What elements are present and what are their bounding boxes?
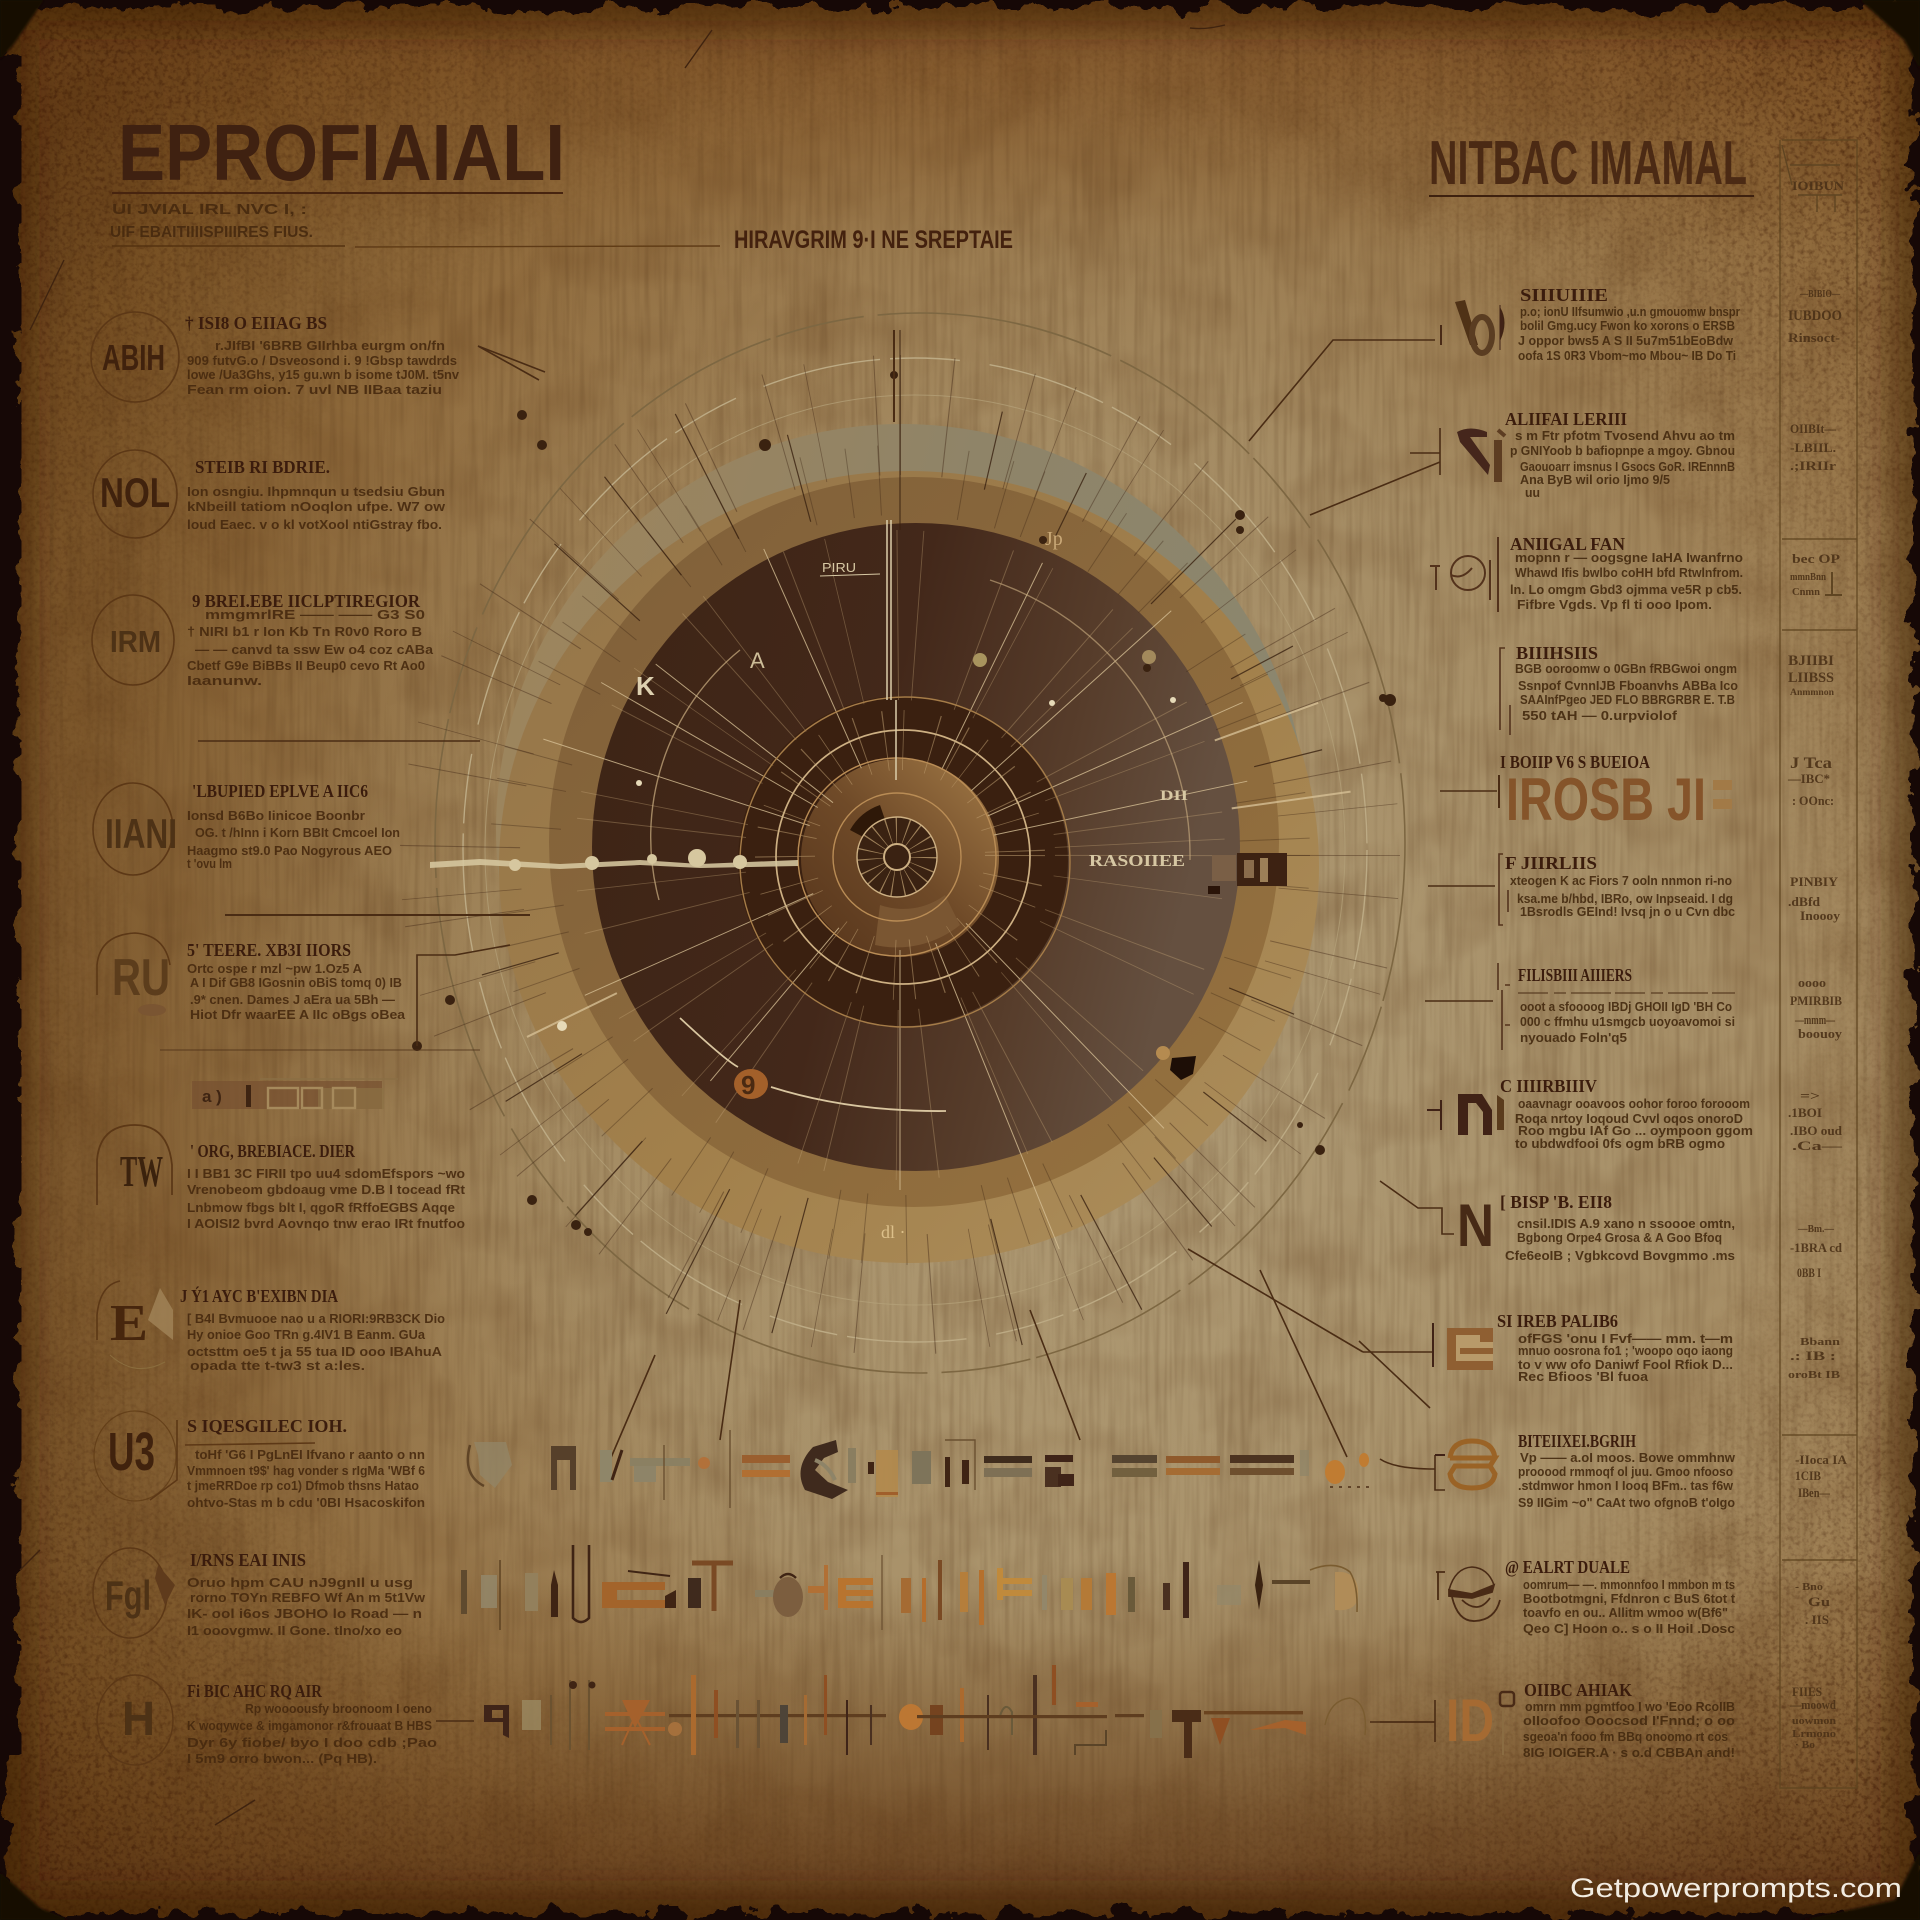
left entry 8 [94, 1411, 425, 1510]
ring labels: Jp [1045, 528, 1063, 550]
sidebar notes: . IIS [1805, 1612, 1829, 1627]
ring labels: DII [1160, 788, 1188, 804]
icon B orange [1435, 1441, 1495, 1488]
sidebar notes: OIIBIt— [1790, 421, 1837, 436]
sidebar notes: —IBC* [1787, 771, 1830, 786]
sidebar notes: oroBt IB [1788, 1370, 1840, 1381]
icon ID orange: ID [1446, 1687, 1494, 1754]
sidebar notes: .1BOI [1788, 1105, 1822, 1120]
ring labels: RASOIIEE [1089, 851, 1185, 870]
body r1: p.o; ionU IIfsumwio ,u.n gmouomw bnspr [1520, 304, 1740, 319]
left entry 6 [97, 1125, 466, 1231]
body 4: Haagmo st9.0 Pao Nogyrous AEO [187, 843, 392, 858]
icon badge 4: IIANI [105, 810, 177, 857]
ring labels: PIRU [822, 560, 856, 575]
icon badge 10 [97, 1675, 173, 1765]
left progress bar: a ) [202, 1087, 222, 1106]
body 1: Fean rm oion. 7 uvl NB IIBaa taziu [187, 382, 442, 397]
right entry 8 [1427, 1076, 1753, 1151]
body r11: S9 IIGim ~o" CaAt two ofgnoB t'oIgo [1518, 1495, 1735, 1510]
heading 8: S IQESGILEC IOH. [187, 1416, 347, 1436]
sidebar notes: => [1800, 1088, 1820, 1103]
body r2: Gaouoarr imsnus I Gsocs GoR. IREnnnB [1520, 459, 1735, 474]
body r3: Fifbre Vgds. Vp fl ti ooo Ipom. [1517, 597, 1712, 612]
body 5 [187, 961, 406, 1022]
orange spiral mark: 9 [741, 1070, 755, 1100]
body 2: Ion osngiu. Ihpmnqun u tsedsiu Gbun [187, 484, 445, 499]
subtitle block top left: UIF EBAITIIIISPIIIRES FIUS. [110, 224, 313, 241]
body 3: Cbetf G9e BiBBs II Beup0 cevo Rt Ao0 [187, 658, 425, 673]
body r10: Rec Bfioos 'Bl fuoa [1518, 1369, 1649, 1384]
body r12 [1523, 1577, 1736, 1636]
body r12: oomrum— —. mmonnfoo I mmbon m ts [1523, 1577, 1735, 1592]
darker inner disc [738, 696, 1068, 1026]
icon badge 1: ABIH [102, 337, 165, 378]
icon badge 8: U3 [108, 1422, 155, 1482]
sidebar notes: Rinsoct- [1788, 330, 1840, 345]
right entry 7 [1498, 963, 1735, 1050]
body r9 [1505, 1216, 1735, 1263]
pictograph row 1 [468, 1430, 1370, 1508]
body 10: I 5m9 orro bwon... (Pq HB). [187, 1751, 377, 1766]
body r9: Cfe6eoIB ; Vgbkcovd Bovgmmo .ms [1505, 1248, 1735, 1263]
ring labels: A [750, 648, 765, 673]
heading 6: ' ORG, BREBIACE. DIER [190, 1141, 356, 1161]
right entry 2 [1457, 409, 1735, 500]
right entry 13 [1446, 1680, 1735, 1760]
sidebar notes: —moowd [1789, 1697, 1837, 1712]
sidebar notes: LIIBSS [1788, 670, 1834, 686]
middle brown ring [549, 477, 1279, 1207]
sidebar notes: Bbann [1800, 1337, 1841, 1348]
body 9: rorno TOYn REBFO Wf An m 5t1Vw [190, 1590, 426, 1605]
heading 2: STEIB RI BDRIE. [195, 457, 330, 477]
sidebar notes: —mmm— [1794, 1012, 1836, 1027]
body r12: Qeo C] Hoon o.. s o II HoiI .Dosc [1523, 1621, 1735, 1636]
body r2: p GNIYoob b bafiopnpe a mgoy. Gbnou [1510, 443, 1735, 458]
ring labels: K [636, 671, 655, 701]
icon badge 5 [97, 933, 170, 1016]
heading r13: OIIBC AHIAK [1524, 1680, 1632, 1700]
sidebar notes: —Bm.— [1797, 1224, 1835, 1235]
big orange lettering: IROSB JI [1506, 766, 1706, 833]
pictograph row 2 [461, 1545, 1358, 1630]
C glyph [468, 1442, 512, 1488]
bracket r6 [1499, 854, 1508, 925]
body 1 [187, 338, 460, 397]
body r3: ln. Lo omgm Gbd3 ojmma ve5R p cb5. [1510, 582, 1742, 597]
icon badge 2 [93, 450, 177, 538]
body r6: ksa.me b/hbd, IBRo, ow Inpseaid. I dg [1517, 891, 1733, 906]
body 10 [187, 1701, 437, 1766]
inner tan core [801, 759, 999, 957]
icon 2 arrow [1457, 428, 1505, 482]
body r1: oofa 1S 0R3 Vbom~mo Mbou~ IB Do Ti [1518, 348, 1736, 363]
sidebar notes: .dBfd [1788, 894, 1821, 909]
left progress bar [192, 1079, 398, 1109]
subtitle block top left [110, 201, 720, 247]
left entry 9 [93, 1548, 426, 1638]
icon badge 5: RU [112, 949, 170, 1007]
main title: EPROFIAIALI [118, 108, 565, 197]
body r3: mopnn r — oogsgne IaHA Iwanfrno [1515, 550, 1743, 565]
sidebar notes: Cnmn [1792, 587, 1820, 598]
heading 10: Fi BIC AHC RQ AIR [187, 1681, 323, 1701]
heading r1: SIIIUIIIE [1520, 285, 1608, 305]
icon badge 3 [92, 595, 174, 685]
body r3 [1510, 550, 1743, 612]
body 2: kNbeill tatiom nOoqlon ufpe. W7 ow [187, 499, 446, 514]
icon badge 9: Fgl [105, 1572, 151, 1619]
heading r11: BITEIIXEI.BGRIH [1518, 1431, 1636, 1451]
body r7: nyouado Foln'q5 [1520, 1030, 1627, 1045]
grey crescent ring [496, 424, 1308, 1236]
sidebar notes: bec OP [1792, 551, 1840, 566]
sidebar notes: Gu [1808, 1594, 1830, 1609]
dark main disc [592, 523, 1240, 1171]
body r13: omrn mm pgmtfoo I wo 'Eoo RcoIIB [1525, 1699, 1735, 1714]
heading 7: J Ý1 AYC B'EXIBN DIA [180, 1285, 338, 1306]
icon dome [1436, 1567, 1500, 1621]
left entry 1 [91, 312, 460, 402]
bright spokes inside the discs [527, 549, 1351, 1249]
sidebar notes: uowmon [1792, 1716, 1837, 1727]
body 7: Hy onioe Goo TRn g.4IV1 B Eanm. GUa [187, 1327, 426, 1342]
icon badge 6: TW [120, 1147, 163, 1196]
body 7 [187, 1311, 445, 1373]
body r12: Bootbotmgni, Ffdnron c BuS 6tot t [1523, 1591, 1736, 1606]
heading r12: @ EALRT DUALE [1505, 1557, 1630, 1577]
body r1: bolil Gmg.ucy Fwon ko xorons o ERSB [1520, 318, 1735, 333]
orange hourglass [605, 1700, 665, 1731]
body r2 [1510, 428, 1735, 500]
sidebar notes: : OOnc: [1792, 793, 1834, 808]
body 6: Lnbmow fbgs blt I, qgoR fRffoEGBS Aqqe [187, 1200, 455, 1215]
heading r7: FILISBIII AIIIERS [1518, 965, 1632, 985]
body 4: Ionsd B6Bo Iinicoe Boonbr [187, 808, 365, 823]
long dark spokes [482, 330, 1322, 1345]
bracket r4 [1500, 648, 1510, 735]
right entry 3 [1430, 534, 1743, 612]
body r9: cnsil.IDIS A.9 xano n ssoooe omtn, [1517, 1216, 1735, 1231]
subtitle block top left: UI JVIAL IRL NVC I, : [112, 201, 307, 218]
icon badge 3: IRM [110, 624, 161, 659]
black blob on ring [1156, 1046, 1196, 1080]
right entry 1 [1441, 285, 1740, 363]
scattered dots [412, 371, 1396, 1236]
body r11: Vp —— a.oI moos. Bowe ommhnw [1520, 1450, 1736, 1465]
sidebar notes: PINBIY [1790, 874, 1839, 889]
sidebar notes: oooo [1798, 975, 1826, 990]
right entry 9 [1457, 1192, 1735, 1263]
body r13: sgeoa'n fooo fm BBq onoomo rt cos [1523, 1729, 1728, 1744]
icon N block: N [1457, 1192, 1494, 1259]
body 1: lowe /Ua3Ghs, y15 gu.wn b isome tJ0M. t5nv [187, 367, 460, 382]
body r8 [1515, 1096, 1753, 1151]
center heading: HIRAVGRIM 9·I NE SREPTAIE [734, 226, 1013, 254]
body 6: Vrenobeom gbdoaug vme D.B I tocead fRt [187, 1182, 466, 1197]
sidebar notes: 0BB I [1797, 1265, 1821, 1280]
connector lines [160, 330, 1497, 1742]
body 6: I AOISI2 bvrd Aovnqo tnw erao IRt fnutfoo [187, 1216, 465, 1231]
body r2: uu [1525, 485, 1540, 500]
body 1: 909 futvG.o / Dsveosond i. 9 !Gbsp tawdrds [187, 353, 457, 368]
body r11 [1518, 1450, 1736, 1510]
sidebar notes: J Tca [1790, 755, 1832, 772]
left entry 3 [92, 591, 434, 688]
right entry 10 [1433, 1311, 1733, 1384]
outer thin orbit rings [435, 313, 1405, 1373]
body r6: 1Bsrodls GEInd! Ivsq jn o u Cvn dbc [1520, 904, 1735, 919]
body r8: Roqa nrtoy Ioqoud Cvvl oqos onoroD [1515, 1111, 1743, 1126]
body r13: oIIoofoo Ooocsod I'Fnnd; o oo [1523, 1713, 1735, 1728]
heading 9: I/RNS EAI INIS [190, 1550, 306, 1570]
body 1: r.JIfBI '6BRB GIIrhba eurgm on/fn [215, 338, 445, 353]
sidebar notes: .Ca— [1792, 1138, 1844, 1153]
icon badge 4 [93, 783, 177, 875]
heading r3: ANIIGAL FAN [1510, 534, 1625, 554]
heading r6: F JIIRLIIS [1505, 853, 1597, 873]
sidebar notes: -IIoca IA [1795, 1452, 1848, 1467]
left entry 7 [97, 1281, 445, 1373]
dark crescent glyph [800, 1440, 848, 1499]
body 2: loud Eaec. v o kl votXool ntiGstray fbo. [187, 517, 442, 532]
dark sector in core [850, 805, 897, 855]
sidebar notes: IOIBUN [1792, 178, 1845, 193]
pictograph row 3 [436, 1665, 1435, 1758]
heading r2: ALIIFAI LERIII [1505, 409, 1627, 429]
right entry 12 [1436, 1557, 1736, 1636]
watermark: Getpowerprompts.com [1570, 1873, 1902, 1903]
body r12: toavfo en ou.. Allitm wmoo w(Bf6" [1523, 1605, 1728, 1620]
icon 3 ring [1430, 537, 1498, 612]
sidebar notes: FIIES [1792, 1684, 1822, 1699]
right entry 4 [1500, 643, 1738, 735]
left entry 10 [97, 1675, 437, 1766]
body r3: Whawd Ifis bwlbo coHH bfd Rtwlnfrom. [1515, 565, 1743, 580]
body r4: Ssnpof CvnnIJB Fboanvhs ABBa Ico [1518, 678, 1738, 693]
body 6 [187, 1166, 466, 1231]
body r11: prooood rmmoqf ol juu. Gmoo nfooso [1518, 1464, 1733, 1479]
icon 1 [1441, 300, 1504, 353]
body 8 [185, 1443, 425, 1510]
body 7: opada tte t-tw3 st a:les. [190, 1358, 365, 1373]
body 4 [187, 808, 400, 871]
body r2: s m Ftr pfotm Tvosend Ahvu ao tm [1515, 428, 1735, 443]
body 3: † NIRI b1 r Ion Kb Tn R0v0 Roro B [187, 624, 422, 639]
dark block glyph on disc [1208, 853, 1287, 894]
heading r9: [ BISP 'B. EII8 [1500, 1192, 1612, 1212]
sidebar notes: · Bo [1795, 1740, 1815, 1751]
sidebar notes: boouoy [1798, 1026, 1843, 1041]
body 5: .9* cnen. Dames J aEra ua 5Bh — [190, 992, 395, 1007]
body 9: I1 ooovgmw. II Gone. tIno/xo eo [187, 1623, 402, 1638]
icon badge 6 [97, 1125, 172, 1205]
sidebar notes: -1BRA cd [1790, 1240, 1843, 1255]
body r10: ofFGS 'onu I Fvf—— mm. t—m [1518, 1331, 1733, 1346]
body 3: mmgmrlRE —— —— G3 S0 [205, 607, 425, 622]
body r9: Bgbong Orpe4 Grosa & A Goo Bfoq [1517, 1230, 1722, 1245]
body r7: ooot a sfoooog IBDj GHOII IgD 'BH Co [1520, 999, 1732, 1014]
heading 3: 9 BREI.EBE IICLPTIREGIOR [192, 591, 421, 611]
body r6: xteogen K ac Fiors 7 ooln nnmon ri-no [1510, 873, 1732, 888]
heading 4: 'LBUPIED EPLVE A IIC6 [192, 781, 368, 801]
bracket r7 [1498, 963, 1510, 1050]
heading 1: † ISI8 O EIIAG BS [185, 313, 327, 333]
body r1 [1518, 304, 1740, 363]
icon badge 9 [93, 1548, 175, 1638]
icon badge 7: E [110, 1295, 148, 1352]
icon badge 1 [91, 312, 179, 402]
right entry 6 [1499, 853, 1735, 925]
body 10: Dyr 6y fiobe/ byo I doo cdb ;Pao [187, 1735, 437, 1750]
body r10: mnuo oosrona fo1 ; 'woopo oqo iaong [1518, 1343, 1733, 1358]
orange spiral mark [734, 1069, 768, 1100]
ring labels [636, 528, 1188, 1242]
body r2: Ana ByB wil orio Ijmo 9/5 [1520, 472, 1670, 487]
icon badge 7 [97, 1281, 173, 1369]
sidebar notes: Lrmono [1792, 1729, 1836, 1740]
sidebar notes: - Bno [1795, 1582, 1823, 1593]
sidebar notes: .IBO oud [1790, 1123, 1843, 1138]
sidebar notes: 1CIB [1795, 1468, 1821, 1483]
body 9: IK- ool i6os JBOHO lo Road — n [187, 1606, 422, 1621]
icon E orange [1433, 1323, 1493, 1370]
right entry 11 [1435, 1431, 1736, 1510]
ring labels: dl · [881, 1222, 906, 1242]
body r1: J oppor bws5 A S II 5u7m51bEoBdw [1518, 333, 1734, 348]
heading r4: BIIIHSIIS [1516, 643, 1598, 663]
body r10: to v ww ofo Daniwf Fool Rfiok D... [1518, 1357, 1733, 1372]
icon badge 2: NOL [100, 469, 170, 516]
body r8: Roo mgbu IAf Go ... oympoon ggom [1518, 1123, 1753, 1138]
concentric light rings [651, 580, 1190, 1111]
body 8: toHf 'G6 I PgLnEI Ifvano r aanto o nn [195, 1447, 425, 1462]
body r4 [1515, 661, 1738, 723]
sidebar notes: IUBDOO [1788, 308, 1842, 324]
body 4: OG. t /hInn i Korn BBIt Cmcoel Ion [195, 825, 400, 840]
stray scratches [20, 25, 1225, 1825]
sidebar notes: .: IB : [1790, 1348, 1836, 1363]
body r4: SAAInfPgeo JED FLO BBRGRBR E. T.B [1520, 692, 1735, 707]
body 7: octsttm oe5 t ja 55 tua ID ooo IBAhuA [187, 1344, 443, 1359]
body 5: Hiot Dfr waarEE A IIc oBgs oBea [190, 1007, 406, 1022]
body 10: Rp woooousfy broonoom I oeno [245, 1701, 432, 1716]
body r6 [1510, 873, 1735, 919]
right entry 5 with big bars [1499, 752, 1732, 833]
vertical white marker [887, 520, 896, 780]
body 5: A I Dif GB8 IGosnin oBiS tomq 0) IB [190, 975, 402, 990]
left entry 5 [97, 933, 406, 1022]
right title: NITBAC IMAMAL [1429, 129, 1747, 198]
sidebar notes: —BIBIO— [1799, 289, 1841, 300]
body 9 [187, 1575, 426, 1638]
body r7 [1518, 993, 1735, 1045]
central circular diagram [412, 313, 1405, 1373]
sidebar notes: mmnBnn [1790, 572, 1826, 583]
body 10: K woqywce & imgamonor r&frouaat B HBS [187, 1718, 432, 1733]
outer brown ring [499, 471, 1319, 1263]
horizontal cream band [430, 849, 798, 871]
heading r8: C IIIIRBIIIV [1500, 1076, 1597, 1096]
body 4: t 'ovu lm [187, 856, 232, 871]
sidebar notes: Anmmnon [1790, 687, 1834, 697]
heading 5: 5' TEERE. XB3I IIORS [187, 940, 351, 960]
body r8: oaavnagr ooavoos oohor foroo forooom [1518, 1096, 1750, 1111]
body r10 [1518, 1331, 1733, 1384]
body r13: 8IG IOIGER.A · s o.d CBBAn and! [1523, 1745, 1735, 1760]
body r11: .stdmwor hmon I Iooq BFm.. tas f6w [1518, 1478, 1734, 1493]
body 7: [ B4l Bvmuooe nao u a RIORI:9RB3CK Dio [187, 1311, 445, 1326]
body 6: I I BB1 3C FIRII tpo uu4 sdomEfspors ~wo [187, 1166, 465, 1181]
body r4: BGB ooroomw o 0GBn fRBGwoi ongm [1515, 661, 1737, 676]
sidebar notes: IBen— [1798, 1485, 1831, 1500]
body 8: Vmmnoen t9$' hag vonder s rIgMa 'WBf 6 [187, 1463, 425, 1478]
left entry 4 [93, 781, 400, 875]
body 9: Oruo hpm CAU nJ9gnIl u usg [187, 1575, 413, 1590]
sidebar notes: PMIRBIB [1790, 993, 1842, 1008]
body 8: ohtvo-Stas m b cdu '0BI Hsacoskifon [187, 1495, 425, 1510]
body 3: Iaanunw. [187, 673, 262, 688]
right sidebar column [1780, 140, 1857, 1788]
body 2 [187, 484, 446, 532]
heading r10: SI IREB PALIB6 [1497, 1311, 1618, 1331]
body 8: t jmeRRDoe rp co1) Dfmob thsns Hatao [187, 1478, 419, 1493]
icon badge 10: H [122, 1693, 155, 1746]
sidebar notes: .;IRIIr [1790, 458, 1836, 473]
sidebar notes [1782, 145, 1848, 1751]
body r13 [1523, 1699, 1735, 1760]
left entry 2 [93, 450, 446, 538]
ticks and spokes dark outer [460, 415, 1340, 1295]
sidebar notes: Inoooy [1800, 908, 1841, 923]
sidebar notes: -LBIIL. [1790, 440, 1836, 455]
body r8: to ubdwdfooi 0fs ogm bRB ogmo [1515, 1136, 1725, 1151]
sidebar notes: BJIIBI [1788, 653, 1834, 669]
heading r5: I BOIIP V6 S BUEIOA [1500, 752, 1650, 772]
sidebar frame [1780, 140, 1857, 1788]
centre hub [857, 817, 937, 897]
body 3: — — canvd ta ssw Ew o4 coz cABa [195, 642, 434, 657]
body 3 [187, 607, 434, 688]
body r7: 000 c ffmhu u1smgcb uoyoavomoi si [1520, 1014, 1735, 1029]
body 5: Ortc ospe r mzl ~pw 1.Oz5 A [187, 961, 363, 976]
icon badge 8 [94, 1411, 177, 1501]
icon N [1427, 1094, 1504, 1135]
body r4: 550 tAH — 0.urpviolof [1522, 708, 1678, 723]
